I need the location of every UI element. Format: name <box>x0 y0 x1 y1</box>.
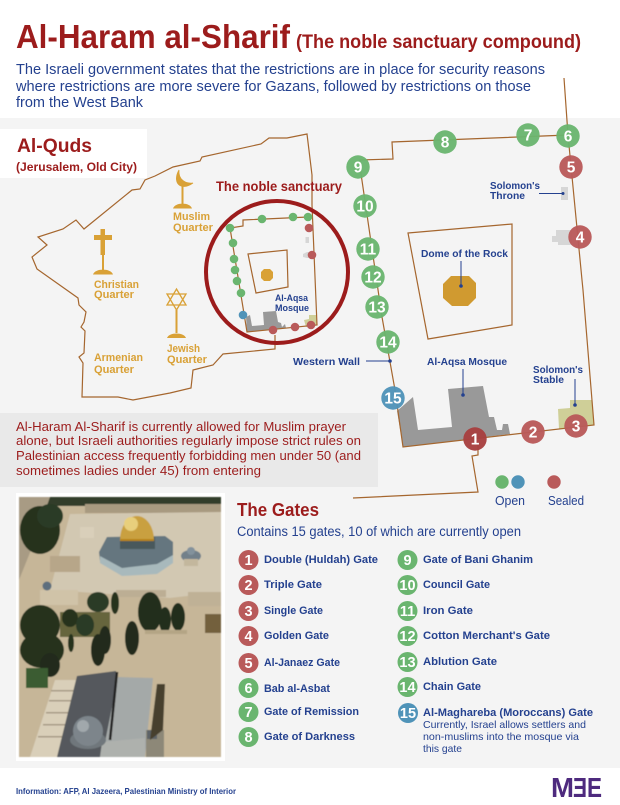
label: Armenian Quarter <box>94 352 143 376</box>
label: Western Wall: Western Wall <box>293 356 360 368</box>
gates list: left column: 1 <box>244 553 253 569</box>
gates list: right column: Ablution Gate <box>423 656 497 668</box>
gates list: left column: 6 <box>244 681 253 697</box>
icon: cross, Christian Quarter: Quarter <box>94 289 135 301</box>
gates list: right column: Council Gate <box>423 579 490 591</box>
gates list: left column: Bab al-Asbat <box>264 683 330 695</box>
gates list: left column: Gate of Darkness <box>264 731 355 743</box>
text panel: access restrictions: Palestinian access frequently forbidding men under 50 (and <box>16 448 361 463</box>
gate markers: 9 <box>354 160 363 176</box>
legend: Sealed <box>548 493 584 508</box>
icon: crescent, Muslim Quarter: Muslim <box>173 211 210 223</box>
icon: crescent, Muslim Quarter <box>173 170 214 234</box>
gates list: right column: Iron Gate <box>423 605 473 617</box>
gate markers: 6 <box>564 128 573 146</box>
map: old city outline <box>32 134 312 400</box>
label: Armenian Quarter: Armenian <box>94 352 143 364</box>
label: Solomon's Throne: Throne <box>490 190 525 202</box>
title: (The noble sanctuary compound) <box>296 32 581 53</box>
gates list: left column: 8 <box>244 730 253 746</box>
label: the noble sanctuary: The noble sanctuary <box>216 179 342 194</box>
gate markers: 1 <box>471 432 480 448</box>
footer: sources: Information: AFP, Al Jazeera, Palestinian Ministry of Interior <box>16 786 237 796</box>
gate markers: 7 <box>524 128 532 144</box>
icon: cross, Christian Quarter: Christian <box>94 279 139 291</box>
gate markers: 2 <box>529 424 537 442</box>
logo: MEE: M <box>551 772 574 803</box>
gates list: right column: non-muslims into the mosque via <box>423 731 579 743</box>
label: Armenian Quarter: Quarter <box>94 364 135 376</box>
gates list: left column: Al-Janaez Gate <box>264 657 340 669</box>
panel: Al-Quds heading: (Jerusalem, Old City) <box>16 160 137 174</box>
gate markers: 3 <box>572 418 581 436</box>
gates list: right column: Chain Gate <box>423 681 481 693</box>
gates list: right column: 13 <box>399 655 416 671</box>
label: Dome of the Rock <box>421 248 508 288</box>
label: Al-Aqsa Mosque <box>427 356 507 397</box>
label: Solomon's Throne: Solomon's <box>490 180 540 192</box>
intro text: where restrictions are more severe for Gazans, followed by restrictions on those <box>15 79 531 95</box>
icon: star, Jewish Quarter <box>167 289 208 366</box>
building: Al-Aqsa Mosque <box>397 386 510 447</box>
compound wall <box>360 78 594 447</box>
building: Golden Gate <box>552 230 572 245</box>
al-aqsa <box>30 680 76 757</box>
logo: MEE <box>551 772 602 803</box>
building: Solomon's Throne <box>561 187 568 200</box>
building: Solomon's Stable <box>558 400 594 429</box>
intro text <box>15 62 545 111</box>
gates list: left column: 7 <box>244 705 253 721</box>
gates list: right column: 10 <box>399 578 416 594</box>
label: Solomon's Stable <box>533 364 583 407</box>
gate markers: 8 <box>441 134 450 152</box>
main map: compound <box>293 78 594 498</box>
gates list: right column <box>398 550 593 755</box>
gates list: left column: Gate of Remission <box>264 706 359 718</box>
title <box>16 18 581 55</box>
gates list: left column: Triple Gate <box>264 579 322 591</box>
text panel: access restrictions: Al-Haram Al-Sharif is currently allowed for Muslim prayer <box>16 419 347 434</box>
gates subtitle: Contains 15 gates, 10 of which are currently open <box>237 524 521 539</box>
gates list: left column: 2 <box>244 578 253 594</box>
heading: The Gates: The Gates <box>237 500 319 520</box>
icon: star, Jewish Quarter: Jewish <box>167 343 200 355</box>
logo: MEE: E <box>587 772 602 803</box>
Dome of the Rock <box>443 276 476 306</box>
gate markers: 14 <box>379 334 397 352</box>
gate markers: 11 <box>360 242 377 258</box>
gates list: right column: Al-Maghareba (Moroccans) Gate <box>423 707 593 719</box>
label: Dome of the Rock: Dome of the Rock <box>421 248 508 260</box>
gates list: right column: 15 <box>400 706 416 722</box>
logo: MEE: E <box>573 772 587 803</box>
dome of the rock <box>99 536 173 575</box>
gates list: left column: 4 <box>244 629 253 645</box>
gates list: right column: 11 <box>400 604 415 620</box>
gate markers: 13 <box>368 300 386 316</box>
trees <box>20 605 60 645</box>
mini map: sanctuary circle: Al-Aqsa <box>275 293 309 304</box>
gates list: right column: Currently, Israel allows settlers and <box>423 719 586 731</box>
panel: Al-Quds heading <box>0 129 147 178</box>
icon: crescent, Muslim Quarter: Quarter <box>173 222 214 234</box>
label: Al-Aqsa Mosque: Al-Aqsa Mosque <box>427 356 507 368</box>
outline continuation <box>353 445 478 498</box>
gates list: right column: 9 <box>403 553 412 569</box>
gate markers: 4 <box>576 230 585 246</box>
Dome of the Rock enclosure <box>408 224 512 339</box>
gates list: left column <box>238 550 378 747</box>
text panel: access restrictions <box>0 413 378 487</box>
title: Al-Haram al-Sharif <box>16 18 291 55</box>
gates list: right column: Gate of Bani Ghanim <box>423 554 533 566</box>
intro text: The Israeli government states that the restrictions are in place for security reasons <box>16 62 545 78</box>
mini map: sanctuary circle: Mosque <box>275 303 309 314</box>
gates list: left column: Double (Huldah) Gate <box>264 554 378 566</box>
gates list: right column: 12 <box>399 629 416 645</box>
label: Solomon's Throne <box>490 180 564 202</box>
gate markers: 12 <box>364 270 382 286</box>
legend <box>495 475 584 508</box>
gates list: right column: Cotton Merchant's Gate <box>423 630 550 642</box>
icon: star, Jewish Quarter: Quarter <box>167 354 208 366</box>
label: Solomon's Stable: Solomon's <box>533 364 583 376</box>
gates list: left column: Golden Gate <box>264 630 329 642</box>
photo: aerial view of the compound <box>16 493 225 761</box>
gates list: right column: 14 <box>399 680 416 696</box>
gate markers: 15 <box>384 390 402 408</box>
gate markers: 5 <box>567 160 576 176</box>
gates list: right column: this gate <box>423 743 462 755</box>
label: Solomon's Stable: Stable <box>533 374 564 386</box>
icon: cross, Christian Quarter <box>93 229 139 301</box>
legend: Open <box>495 493 525 508</box>
text panel: access restrictions: sometimes ladies under 45) from entering <box>16 463 261 478</box>
label: Western Wall <box>293 356 392 368</box>
mini map: sanctuary circle <box>206 201 348 343</box>
gates list: left column: Single Gate <box>264 605 323 617</box>
gate markers: 10 <box>356 198 374 216</box>
intro text: from the West Bank <box>16 95 144 111</box>
gates list: left column: 3 <box>244 604 253 620</box>
panel: Al-Quds heading: Al-Quds <box>17 136 92 157</box>
gates list: left column: 5 <box>244 656 253 672</box>
gate markers <box>346 123 592 451</box>
text panel: access restrictions: alone, but Israeli authorities regularly impose strict rules on <box>16 433 361 448</box>
